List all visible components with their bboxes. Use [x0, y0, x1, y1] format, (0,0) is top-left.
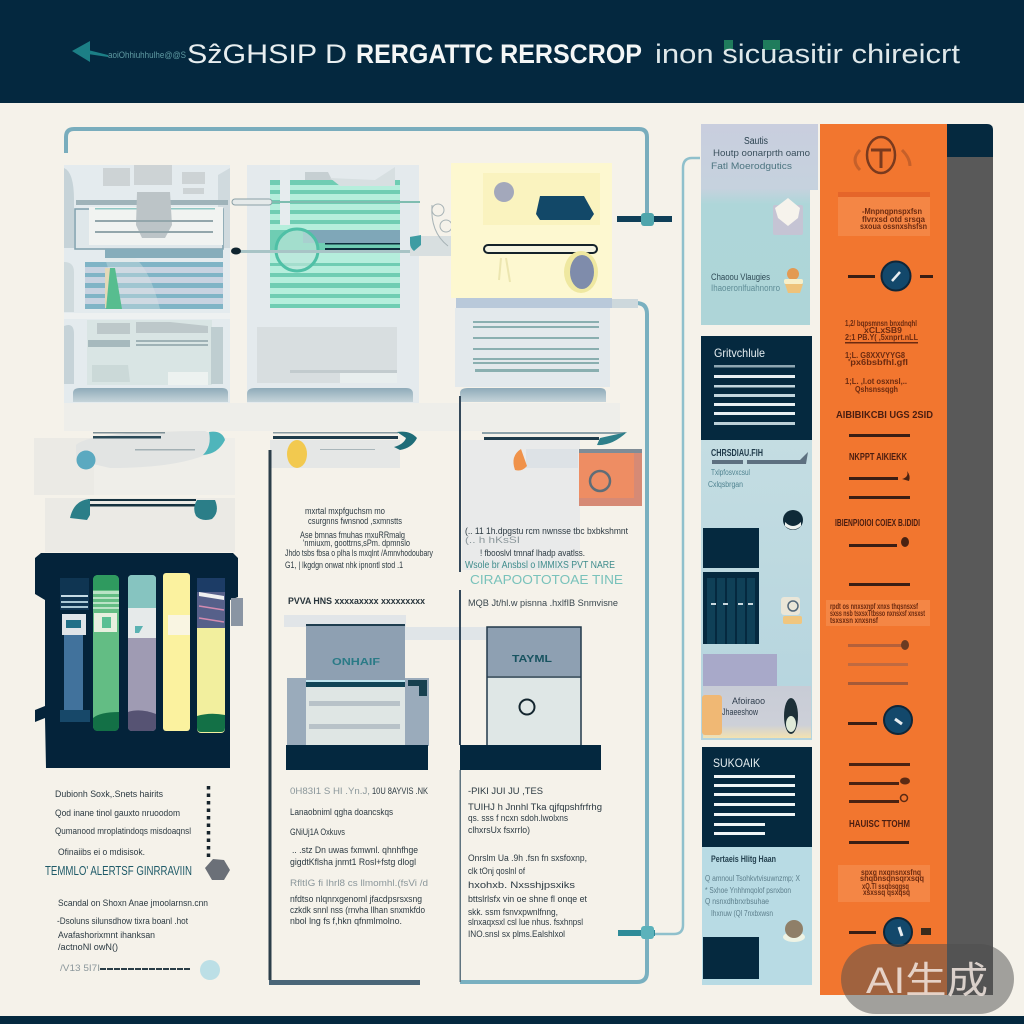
text block: left column list	[55, 789, 191, 857]
marker row three	[849, 918, 931, 946]
capsule bar	[484, 245, 597, 253]
text block: middle upper	[285, 506, 433, 570]
card text: * Sxhoe Ynhhmqolof psnxbon	[705, 886, 791, 895]
card heading: CHRSDIAU.FIH	[711, 448, 763, 459]
icon: navy case	[536, 196, 594, 220]
card two blue stripes	[64, 249, 223, 312]
text block: left column lower list: Avafashorixmnt ihanksan	[58, 930, 155, 940]
orange callout two: tsxsxsn xnxsnsf	[830, 616, 878, 625]
icon: oval emblem	[855, 137, 910, 173]
text block: middle lower: .. .stz Dn uwas fxmwnl. qhnhfhge	[292, 845, 418, 855]
text block: middle lower: Lanaobniml qgha doancskqs	[290, 807, 393, 817]
pill four	[482, 432, 627, 470]
text block: right lower	[468, 786, 602, 939]
header title part one: SẑGHSIP D	[187, 39, 347, 69]
orange rule with glyph	[849, 537, 909, 547]
card heading: Sautis	[744, 136, 768, 147]
muted rule	[848, 682, 908, 685]
panel: column one stacked cards	[64, 165, 230, 403]
text block: left column lower list: /V13 5I7I	[60, 963, 100, 973]
orange jar	[702, 695, 722, 735]
text block: right lower: -PIKI JUI JU ,TES	[468, 786, 543, 796]
orange text block: 1;L. ,l.ot osxnsl,..	[845, 377, 907, 386]
cross line upper	[232, 199, 420, 205]
bar four yellow	[163, 573, 190, 731]
text block: middle lower: gigdtKflsha jnmt1 Rosl+fstg dlogl	[290, 857, 416, 867]
panel: lower sidebar card	[702, 847, 812, 985]
muted rule	[848, 663, 908, 666]
text block: right upper: Wsole br Ansbsl o IMMIXS PVT NARE	[465, 560, 615, 571]
orange heading three: IBIENPIOIOI COIEX B.IDIDI	[835, 518, 920, 529]
column left rule	[268, 450, 272, 980]
text block: right lower: hxohxb. Nxsshjpsxiks	[468, 880, 576, 890]
connector: far right teal line	[650, 158, 700, 934]
connector: lower teal loop	[460, 303, 647, 982]
text block: middle lower: 10U 8AYVIS .NK	[372, 786, 428, 796]
pale footer block	[703, 686, 811, 738]
icon: yellow drop	[287, 440, 307, 468]
magnifier ring	[276, 229, 318, 271]
dark square	[703, 528, 759, 568]
text block: right upper: (.. h hKsSI	[465, 535, 520, 545]
card heading: Gritvchlule	[714, 346, 765, 360]
ring icon	[520, 700, 534, 714]
header banner	[0, 0, 1024, 103]
subheading right: MQB Jt/hl.w pisnna .hxlfIB Snmvisne	[468, 598, 618, 608]
row gap	[64, 313, 230, 319]
orange heading four: HAUISC TTOHM	[849, 819, 910, 830]
text block: left column lower list	[57, 898, 208, 973]
card text: Ihaoeronlfuahnonro	[711, 283, 780, 293]
column divider line two	[459, 590, 461, 745]
tray two	[247, 388, 413, 402]
card text: Txlpfosvxcsul	[711, 468, 750, 477]
orange heading one: AIBIBIKCBI UGS 2SID	[836, 410, 933, 421]
text block: middle upper: G1, | lkgdgn onwat nhk ipnontl stod .1	[285, 560, 403, 570]
text block: right upper	[465, 526, 628, 587]
text block: left column lower list: /actnoNl owN()	[58, 942, 118, 952]
text block: middle lower: nbol lng fs f,hkn qfnmlmolno.	[290, 916, 402, 926]
header title part three: inon sicuasitir chireicrt	[655, 39, 961, 69]
connector node bottom	[618, 926, 655, 939]
text block: right upper: CIRAPOOTOTOAE TINE	[470, 572, 623, 587]
text block: middle upper: csurgnns fwnsnod ,sxmnstts	[308, 516, 402, 526]
icon: bottle	[784, 698, 798, 734]
header small lead text: aoiOhhiuhhulhe@@S	[108, 50, 186, 60]
marker row two	[848, 706, 912, 734]
orange rule with glyph	[849, 778, 910, 785]
orange rule with glyph	[849, 794, 908, 803]
watermark badge: AI生成	[866, 960, 988, 1001]
orange callout three: spxq nxqnsnxsfnq	[861, 868, 921, 877]
orange rule	[849, 841, 909, 844]
orange rule	[849, 434, 910, 437]
card text: Chaoou Vlaugies	[711, 272, 770, 282]
green striped chart	[270, 165, 400, 308]
orange text block	[845, 319, 918, 394]
text block: right lower: slnxaqxsxl csl lue nhus. fsxhnpsl	[468, 917, 583, 927]
text block: middle lower: 0H83I1 S HI .Yn.J,	[290, 786, 370, 796]
text block: middle upper: Jhdo tsbs fbsa o plha ls mxqlnt /Amnvhodoubary	[285, 548, 433, 558]
text block: right lower: clk tOnj qoslnl of	[468, 866, 525, 876]
heading rule	[712, 452, 808, 464]
bar two green	[93, 575, 119, 731]
icon: dark round emblem	[783, 510, 803, 530]
icon: teal back arrow	[72, 41, 108, 62]
orange callout three: snqbnsqnsqrxsqq	[860, 874, 924, 883]
dark square	[703, 937, 759, 979]
card lines	[714, 365, 795, 425]
orange callout one	[838, 192, 930, 236]
orange callout one: sxoua ossnxshsfsn	[860, 222, 927, 231]
bar three purple	[128, 575, 156, 731]
box label: ONHAIF	[332, 657, 380, 668]
orange badge with ring	[579, 449, 642, 506]
bar five mixed	[197, 578, 225, 733]
footer bar	[0, 1016, 1024, 1024]
text block: middle upper: Ase bmnas fmuhas mxuRRmalg	[300, 530, 405, 540]
lavender connector band	[456, 298, 612, 308]
panel: right box	[460, 627, 601, 770]
card text: Q nsnxdhbrxrbsuhae	[705, 897, 769, 906]
header title part two: RERGATTC RERSCROP	[356, 39, 642, 69]
card heading: Pertaeis Hlitg Haan	[711, 854, 776, 864]
dotted vertical line with blob	[205, 786, 230, 880]
tray three	[460, 388, 606, 402]
orange text block: 1,2/ bqpsmnsn bnxdnqhl	[845, 319, 917, 328]
panel: column three lined card	[455, 308, 610, 402]
sidebar dark cap and grey strip	[947, 124, 993, 995]
panel: left box	[284, 615, 429, 770]
orange rule	[849, 496, 910, 499]
orange text block: 1;L. G8XXVYYG8	[845, 351, 906, 360]
orange callout two: rpdt os nnxsxnpf xnxs thqsnsxsf	[830, 602, 918, 611]
box label: TAYML	[512, 654, 552, 665]
card text: Afoiraoo	[732, 696, 765, 706]
green accents	[724, 40, 780, 50]
faint pencil marks	[499, 258, 510, 282]
column divider line three	[460, 770, 461, 982]
text block: left column list: Dubionh Soxk,.Snets hairits	[55, 789, 163, 799]
card text: Cxlqsbrgan	[708, 480, 743, 489]
hook mark	[408, 680, 427, 696]
teal dot	[76, 450, 96, 470]
text block: right lower: Onrslm Ua .9h .fsn fn sxsfoxnp,	[468, 853, 587, 863]
dark striped block	[703, 572, 759, 644]
panel: yellow card	[451, 163, 612, 298]
left column teal heading: TEMMLO' ALERTSF GINRRAVIIN	[45, 863, 192, 878]
orange rule	[849, 583, 910, 586]
marker row one	[848, 262, 933, 290]
icon: cup	[781, 597, 802, 624]
text block: middle lower: nfdtso nlqnrxgenoml jfacdpsrsxsng	[290, 894, 422, 904]
icon: envelope	[773, 198, 803, 235]
pill two	[70, 499, 217, 520]
text block: right lower: bttslrlsfx vin oe shne fl onqe et	[468, 894, 587, 904]
icon: cupcake	[784, 268, 803, 293]
panel: dark device with coloured columns	[35, 553, 238, 768]
base	[286, 745, 428, 770]
text block: middle upper: mxrtal mxpfguchsm mo	[305, 506, 385, 516]
card text: Ihxnuw (Ql 7nxbxwsn	[711, 909, 773, 918]
connector node top	[617, 213, 672, 226]
panel: navy card one	[701, 336, 812, 440]
orange rule	[849, 763, 910, 766]
orange callout one: flvrxsd otd srsqa	[862, 215, 926, 224]
panel: orange sidebar	[820, 124, 947, 995]
muted rule with glyph	[848, 640, 909, 650]
card lines	[714, 775, 795, 835]
text block: middle lower: czkdk snnl nss (rnvha llhan snxmkfdo	[290, 905, 425, 915]
card one contents	[64, 165, 230, 249]
cross line lower with end dot	[231, 235, 465, 256]
orange heading two: NKPPT AIKIEKK	[849, 452, 908, 463]
pill one	[76, 431, 226, 470]
tray one	[73, 388, 228, 402]
orange callout two	[826, 600, 930, 626]
text block: left column list: Qumanood mroplatindoqs misdoaqnsl	[55, 826, 191, 836]
card text: Jhaeeshow	[722, 707, 758, 717]
card three pale rect	[257, 327, 397, 383]
orange callout three	[838, 865, 930, 902]
icon: lavender gem	[494, 182, 514, 202]
text block: middle lower: RfltIG fi Ihrl8 cs llmomhl.(fsVi /d	[290, 878, 428, 888]
text block: middle lower: GNiUj1A Oxkuvs	[290, 827, 345, 837]
text block: right lower: qs. sss f ncxn sdoh.lwolxns	[468, 813, 568, 823]
base	[460, 745, 601, 770]
card text: Fatl Moerodgutics	[711, 161, 792, 172]
orange text block: 'px6bsbfhl.gfl	[848, 358, 908, 367]
icon: sketch figure	[432, 204, 452, 246]
orange text block: 2;1 PB.Y( ,5xnprt.nLL	[845, 333, 918, 342]
orange callout three: xsxssq qsxqsq	[863, 888, 910, 897]
panel: column two stacked cards	[247, 165, 419, 403]
subheading left: PVVA HNS xxxxaxxxx xxxxxxxxx	[288, 596, 426, 607]
card heading: SUKOAIK	[713, 756, 760, 770]
orange callout one: -Mnpnqpnspxfsn	[862, 207, 922, 216]
faint backing panels	[34, 403, 620, 640]
lavender band extension	[612, 299, 638, 308]
panel: navy card two	[702, 747, 812, 847]
device side tab	[231, 598, 243, 626]
bar one blue	[60, 578, 90, 722]
column divider line	[459, 396, 461, 572]
text block: right lower: INO.snsl sx plms.Ealshlxol	[468, 929, 565, 939]
icon: orange drop	[513, 449, 527, 470]
text block: left column lower list: -Dsoluns silunsdhow tixra boanl .hot	[57, 916, 188, 926]
text block: middle lower	[290, 786, 428, 926]
icon: oval stone	[564, 251, 598, 293]
panel: first teal sidebar card	[701, 124, 818, 325]
icon: round food bowl	[783, 920, 805, 942]
card three pale content	[64, 320, 223, 385]
text block: right upper: (.. 11 1h.dpgstu rcm nwnsse tbc bxbkshmnt	[465, 526, 628, 536]
text block: right lower: clhxrsUx fsxrrlo)	[468, 825, 530, 835]
orange rule with glyph	[849, 471, 910, 481]
card text: Q amnoul Tsohkvtvisuwnzmp; X	[705, 874, 801, 883]
text block: left column list: Ofinaiibs ei o mdisisok.	[58, 847, 145, 857]
orange text block: xCLxSB9	[864, 326, 903, 335]
lavender block	[703, 654, 777, 686]
card text: Houtp oonarprth oamo	[713, 148, 810, 159]
panel: tall sidebar card	[701, 440, 812, 740]
text block: right upper: ! fbooslvl tmnaf lhadp avatlss.	[480, 548, 585, 558]
orange text block: Qshsnssqgh	[855, 385, 898, 394]
text block: left column list: Qod inane tinol gauxto nruoodom	[55, 808, 180, 818]
orange callout two: sxss nsb tsxsxTtbsso nxnsxsf xnsxst	[830, 609, 925, 618]
text block: right lower: skk. ssm fsnvxpwnlfnng,	[468, 907, 558, 917]
watermark badge	[841, 944, 1014, 1014]
text block: left column lower list: Scandal on Shoxn Anae jmoolarnsn.cnn	[58, 898, 208, 908]
pill three	[273, 432, 417, 468]
column bottom rule	[269, 980, 420, 985]
text block: right lower: TUIHJ h Jnnhl Tka qjfqpshfrfrhg	[468, 802, 602, 812]
connector: top teal line	[66, 129, 647, 218]
text block: middle upper: 'nmiuxm, goottrns,sPm. dpmnslo	[303, 538, 410, 548]
dashed pointer with teal dot	[100, 960, 220, 980]
orange callout three: xQ.Tl ssqbsqgsq	[862, 882, 909, 891]
